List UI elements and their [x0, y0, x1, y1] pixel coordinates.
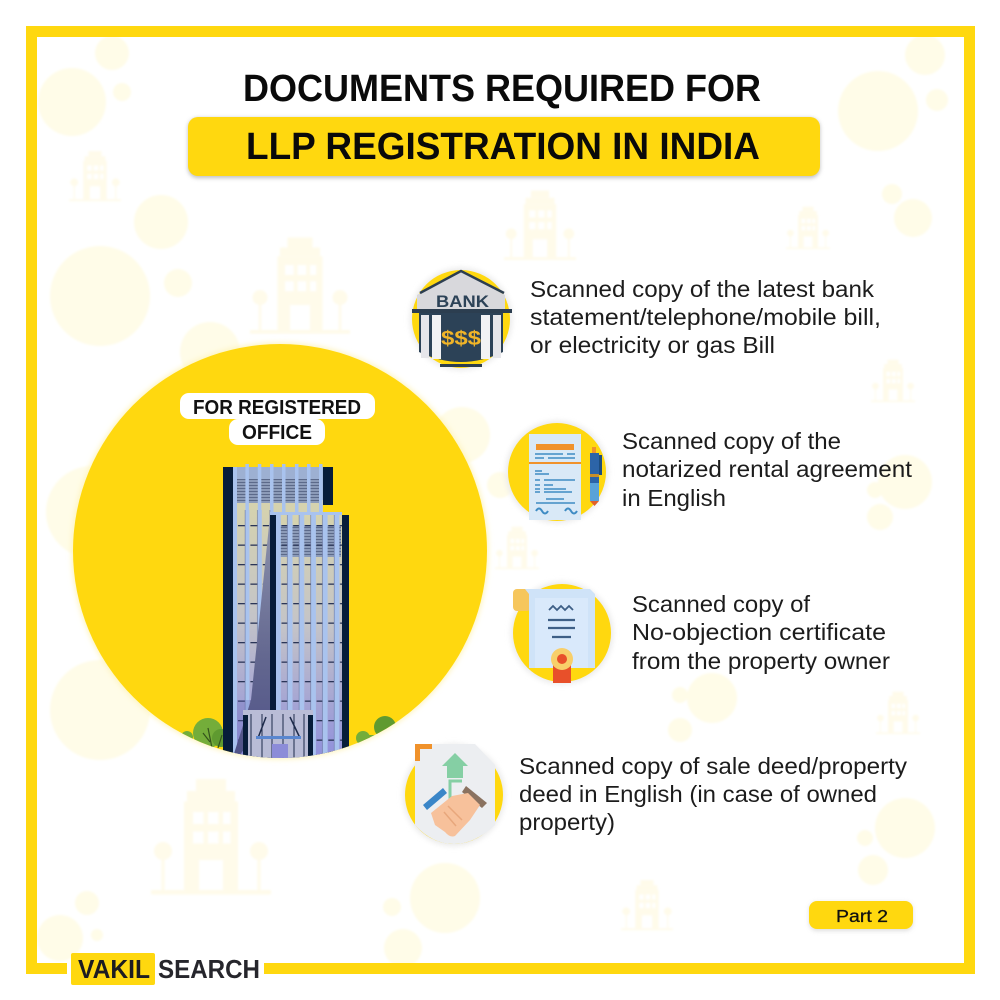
text: sale deed: deed in English (in case of owned [519, 781, 877, 807]
text: rental agreement: notarized rental agreement [622, 456, 913, 482]
icon: bank [410, 268, 512, 370]
yellow circle [73, 344, 487, 758]
part label [809, 901, 913, 931]
part label: Part 2 [836, 906, 888, 926]
background pattern: faint buildings [69, 151, 920, 930]
text: rental agreement: in English [622, 485, 726, 511]
icon: bank: $$$ [441, 328, 481, 350]
text: no-objection certificate: Scanned copy of [632, 591, 811, 617]
brand logo [71, 953, 260, 985]
trees [182, 716, 396, 748]
title banner [188, 117, 820, 178]
text: bank statement [530, 276, 881, 358]
icon: bank: BANK [436, 292, 490, 311]
label: for registered office [180, 393, 375, 445]
text: bank statement: statement/telephone/mobile bill, [530, 304, 881, 330]
title: DOCUMENTS REQUIRED FOR [243, 68, 761, 110]
text: no-objection certificate [632, 591, 890, 674]
text: no-objection certificate: from the property owner [632, 648, 890, 674]
entrance canopy [243, 710, 313, 760]
text: rental agreement [622, 428, 913, 511]
icon: rental agreement [506, 421, 608, 523]
text: no-objection certificate: No-objection certificate [632, 619, 886, 645]
text: sale deed [519, 753, 908, 835]
text: bank statement: or electricity or gas Bill [530, 332, 775, 358]
text: bank statement: Scanned copy of the latest bank [530, 276, 875, 302]
shadow wedge [232, 516, 270, 760]
brand logo: SEARCH [158, 954, 260, 984]
label: for registered office: OFFICE [242, 422, 312, 444]
icon: sale deed handshake [403, 744, 505, 846]
text: sale deed: Scanned copy of sale deed/property [519, 753, 908, 779]
circle halo [72, 343, 488, 759]
text: sale deed: property) [519, 809, 615, 835]
right tower [270, 512, 349, 760]
icon: no-objection certificate [511, 582, 613, 684]
text: rental agreement: Scanned copy of the [622, 428, 841, 454]
panel: registered office circle [72, 343, 488, 760]
left tower [223, 464, 333, 760]
illustration: office tower [181, 464, 398, 760]
title banner: LLP REGISTRATION IN INDIA [246, 126, 760, 168]
label: for registered office: FOR REGISTERED [193, 397, 361, 419]
brand logo: VAKIL [78, 954, 150, 984]
